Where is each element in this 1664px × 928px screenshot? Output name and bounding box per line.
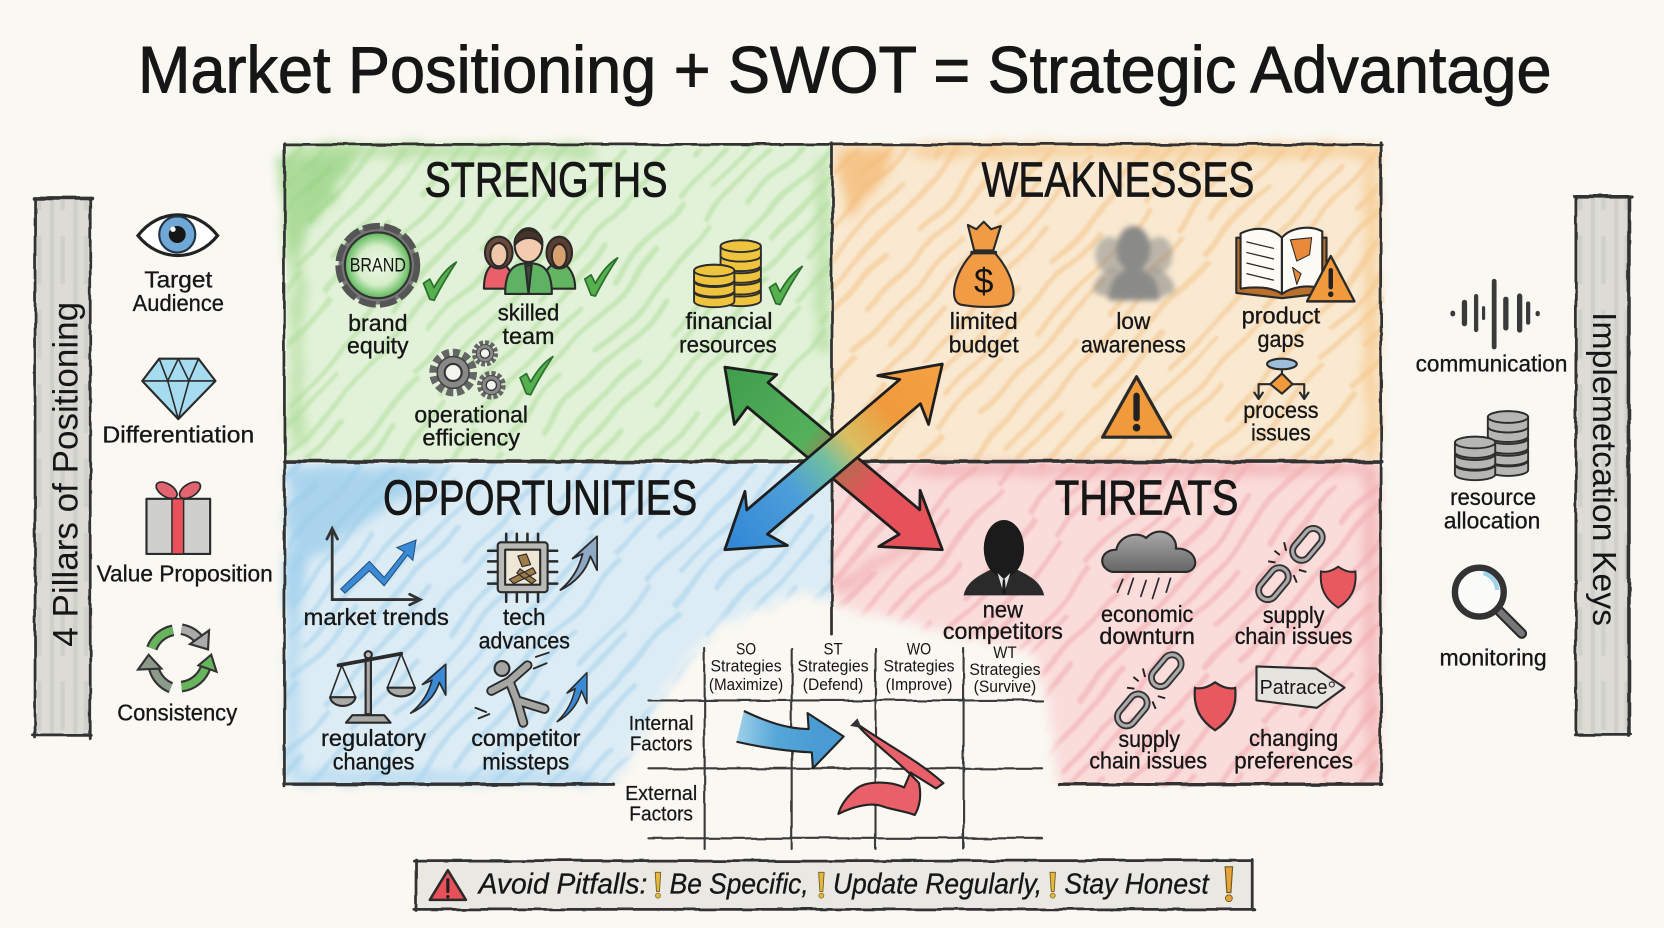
item: competitor missteps: competitor (471, 725, 581, 751)
item: limited budget (949, 222, 1019, 357)
column header: SO: Strategies (710, 658, 782, 676)
item: low awareness: awareness (1081, 331, 1186, 357)
item: low awareness (1081, 226, 1186, 357)
item: operational efficiency: operational (414, 401, 528, 427)
icon: magnifying glass (1455, 568, 1522, 634)
item: competitor missteps: missteps (482, 748, 569, 774)
icon: sound wave (1453, 281, 1538, 347)
icon: open book (1236, 228, 1327, 298)
item: skilled team (484, 228, 618, 349)
item: brand equity (339, 226, 456, 358)
row label: internal factors: Factors (630, 733, 692, 755)
item: changing preferences: changing (1249, 725, 1338, 751)
heading: strengths: STRENGTHS (425, 153, 668, 207)
column header: ST (798, 641, 869, 694)
implementation: resource allocation: allocation (1444, 507, 1540, 533)
item: financial resources: resources (679, 331, 777, 357)
pillar: differentiation (102, 359, 254, 448)
implementation: resource allocation: resource (1450, 484, 1536, 510)
right bar: implementation keys (1575, 196, 1631, 735)
pillar: target audience (133, 215, 224, 316)
heading: threats: THREATS (1055, 472, 1238, 526)
icon: red shield (1321, 567, 1356, 608)
icon: money bag: $ (974, 262, 993, 301)
column header: WT: (Survive) (974, 678, 1036, 696)
row label: external factors: Factors (629, 803, 693, 825)
callout: avoid pitfalls banner: Be Specific, (670, 869, 809, 901)
item: supply chain issues (lower) (1089, 651, 1235, 773)
item: new competitors: competitors (943, 618, 1063, 644)
row label: internal factors (629, 713, 694, 755)
icon: gold coins (694, 240, 761, 307)
icon: broken chain (1114, 651, 1185, 730)
item: limited budget: limited (950, 308, 1018, 334)
column header: ST: ST (824, 641, 843, 659)
title: Market Positioning + SWOT = Strategic Advantage (138, 32, 1551, 106)
icon: team of people (484, 228, 575, 294)
pillar: consistency: Consistency (117, 700, 238, 726)
icon: grey coins (1455, 411, 1528, 480)
item: product gaps: product (1242, 303, 1321, 329)
right bar: implementation keys: Implemetcation Keys (1586, 312, 1623, 626)
column header: ST: Strategies (798, 658, 869, 676)
item: limited budget: budget (949, 331, 1019, 357)
column header: WT: WT (993, 644, 1017, 662)
panel: weaknesses background (833, 145, 1380, 461)
icon: warning triangle (1307, 256, 1355, 301)
pillar: value proposition (97, 479, 273, 587)
item: competitor missteps (471, 653, 587, 774)
item: product gaps: gaps (1258, 326, 1304, 352)
item: tech advances (479, 534, 597, 653)
item: skilled team: skilled (498, 299, 559, 325)
item: economic downturn: downturn (1099, 623, 1195, 649)
item: tech advances: tech (503, 604, 545, 630)
icon: up arrow (411, 664, 446, 713)
chart: TOWS strategy matrix (625, 641, 1042, 849)
icon: check mark (520, 357, 553, 395)
arrow: green to red diagonal (725, 367, 942, 550)
implementation: monitoring: monitoring (1440, 644, 1547, 670)
item: skilled team: team (503, 323, 555, 349)
callout: avoid pitfalls banner: Avoid Pitfalls: (477, 869, 647, 901)
heading: opportunities: OPPORTUNITIES (383, 472, 697, 526)
implementation: monitoring (1440, 568, 1547, 670)
icon: falling figure (475, 653, 549, 723)
implementation: communication: communication (1416, 350, 1567, 376)
item: tech advances: advances (479, 627, 570, 653)
item: low awareness: low (1116, 308, 1151, 334)
panel: opportunities background (287, 464, 831, 784)
item: market trends (304, 528, 449, 630)
item: process issues: issues (1251, 419, 1311, 445)
item: regulatory changes (321, 651, 446, 774)
icon: cycle arrows (138, 629, 217, 688)
row label: external factors (625, 783, 697, 825)
column header: ST: (Defend) (803, 676, 863, 694)
item: supply chain issues (upper) (1235, 525, 1356, 649)
pillar: differentiation: Differentiation (102, 422, 254, 448)
column header: SO (709, 641, 783, 694)
panel: threats background (833, 464, 1380, 784)
item: changing preferences: preferences (1234, 747, 1353, 773)
arrow: blue to orange diagonal (725, 364, 942, 550)
column header: WT (969, 644, 1041, 696)
pillar: consistency (117, 629, 238, 726)
icon: brand badge: BRAND (350, 256, 406, 277)
icon: up arrow (557, 673, 587, 722)
column header: WT: Strategies (969, 661, 1041, 679)
item: supply chain issues (upper): supply (1263, 602, 1325, 628)
item: economic downturn: economic (1101, 601, 1193, 627)
panel: strengths background (278, 145, 831, 461)
item: big warning sign (1103, 377, 1171, 437)
pillar: target audience: Audience (133, 290, 224, 316)
item: market trends: market trends (304, 604, 449, 630)
column header: WO: Strategies (883, 658, 955, 676)
implementation: resource allocation (1444, 411, 1540, 533)
arrow: red matrix arrow (838, 718, 943, 815)
icon: rain cloud (1102, 532, 1195, 599)
callout: avoid pitfalls banner: Update Regularly, (833, 869, 1042, 901)
item: operational efficiency (414, 342, 553, 451)
item: brand equity: equity (347, 332, 409, 358)
icon: signpost tag: Patrace (1260, 677, 1328, 699)
pillar: target audience: Target (144, 267, 213, 293)
implementation: communication (1416, 281, 1567, 376)
item: supply chain issues (lower): chain issues (1089, 747, 1207, 773)
column header: WO (883, 641, 955, 694)
item: process issues (1243, 359, 1319, 445)
item: new competitors (943, 520, 1063, 644)
icon: broken chain (1255, 525, 1326, 603)
column header: WO: (Improve) (886, 676, 952, 694)
icon: blurred people (1093, 226, 1175, 300)
pillar: value proposition: Value Proposition (97, 561, 273, 587)
item: brand equity: brand (348, 310, 408, 336)
icon: check mark (423, 262, 456, 300)
item: supply chain issues (upper): chain issues (1235, 623, 1353, 649)
item: process issues: process (1243, 397, 1319, 423)
icon: diamond (142, 359, 215, 419)
heading: weaknesses: WEAKNESSES (982, 153, 1254, 207)
item: regulatory changes: regulatory (321, 725, 427, 751)
item: economic downturn (1099, 532, 1195, 649)
row label: internal factors: Internal (629, 713, 694, 735)
left bar: 4 pillars of positioning: 4 Pillars of Positioning (47, 302, 86, 647)
item: changing preferences (1234, 666, 1353, 773)
item: new competitors: new (983, 597, 1024, 623)
item: financial resources (679, 240, 802, 357)
icon: balance scale (330, 651, 415, 723)
column header: SO: SO (736, 641, 756, 659)
icon: red warning triangle (430, 870, 466, 900)
icon: microchip (488, 534, 557, 602)
left bar: 4 pillars of positioning (33, 198, 92, 739)
icon: growth chart (327, 528, 420, 605)
item: operational efficiency: efficiency (422, 425, 521, 451)
item: product gaps (1236, 228, 1355, 352)
row label: external factors: External (625, 783, 697, 805)
icon: up arrow (560, 536, 597, 590)
icon: flow chart (1254, 359, 1308, 399)
icon: eye (138, 215, 218, 255)
icon: silhouette businessman (964, 520, 1044, 595)
column header: SO: (Maximize) (709, 676, 783, 694)
icon: red shield (1195, 682, 1235, 730)
item: financial resources: financial (686, 308, 773, 334)
item: supply chain issues (lower): supply (1119, 726, 1181, 752)
item: regulatory changes: changes (333, 748, 414, 774)
icon: gift box (146, 479, 210, 554)
icon: gears (433, 342, 503, 397)
callout: avoid pitfalls banner (414, 860, 1254, 910)
SWOT grid frame (284, 142, 1382, 786)
column header: WO: WO (907, 641, 931, 659)
arrow: blue matrix arrow (736, 711, 844, 768)
callout: avoid pitfalls banner: Stay Honest (1064, 869, 1210, 901)
icon: check mark (585, 258, 618, 296)
icon: check mark (769, 266, 802, 305)
